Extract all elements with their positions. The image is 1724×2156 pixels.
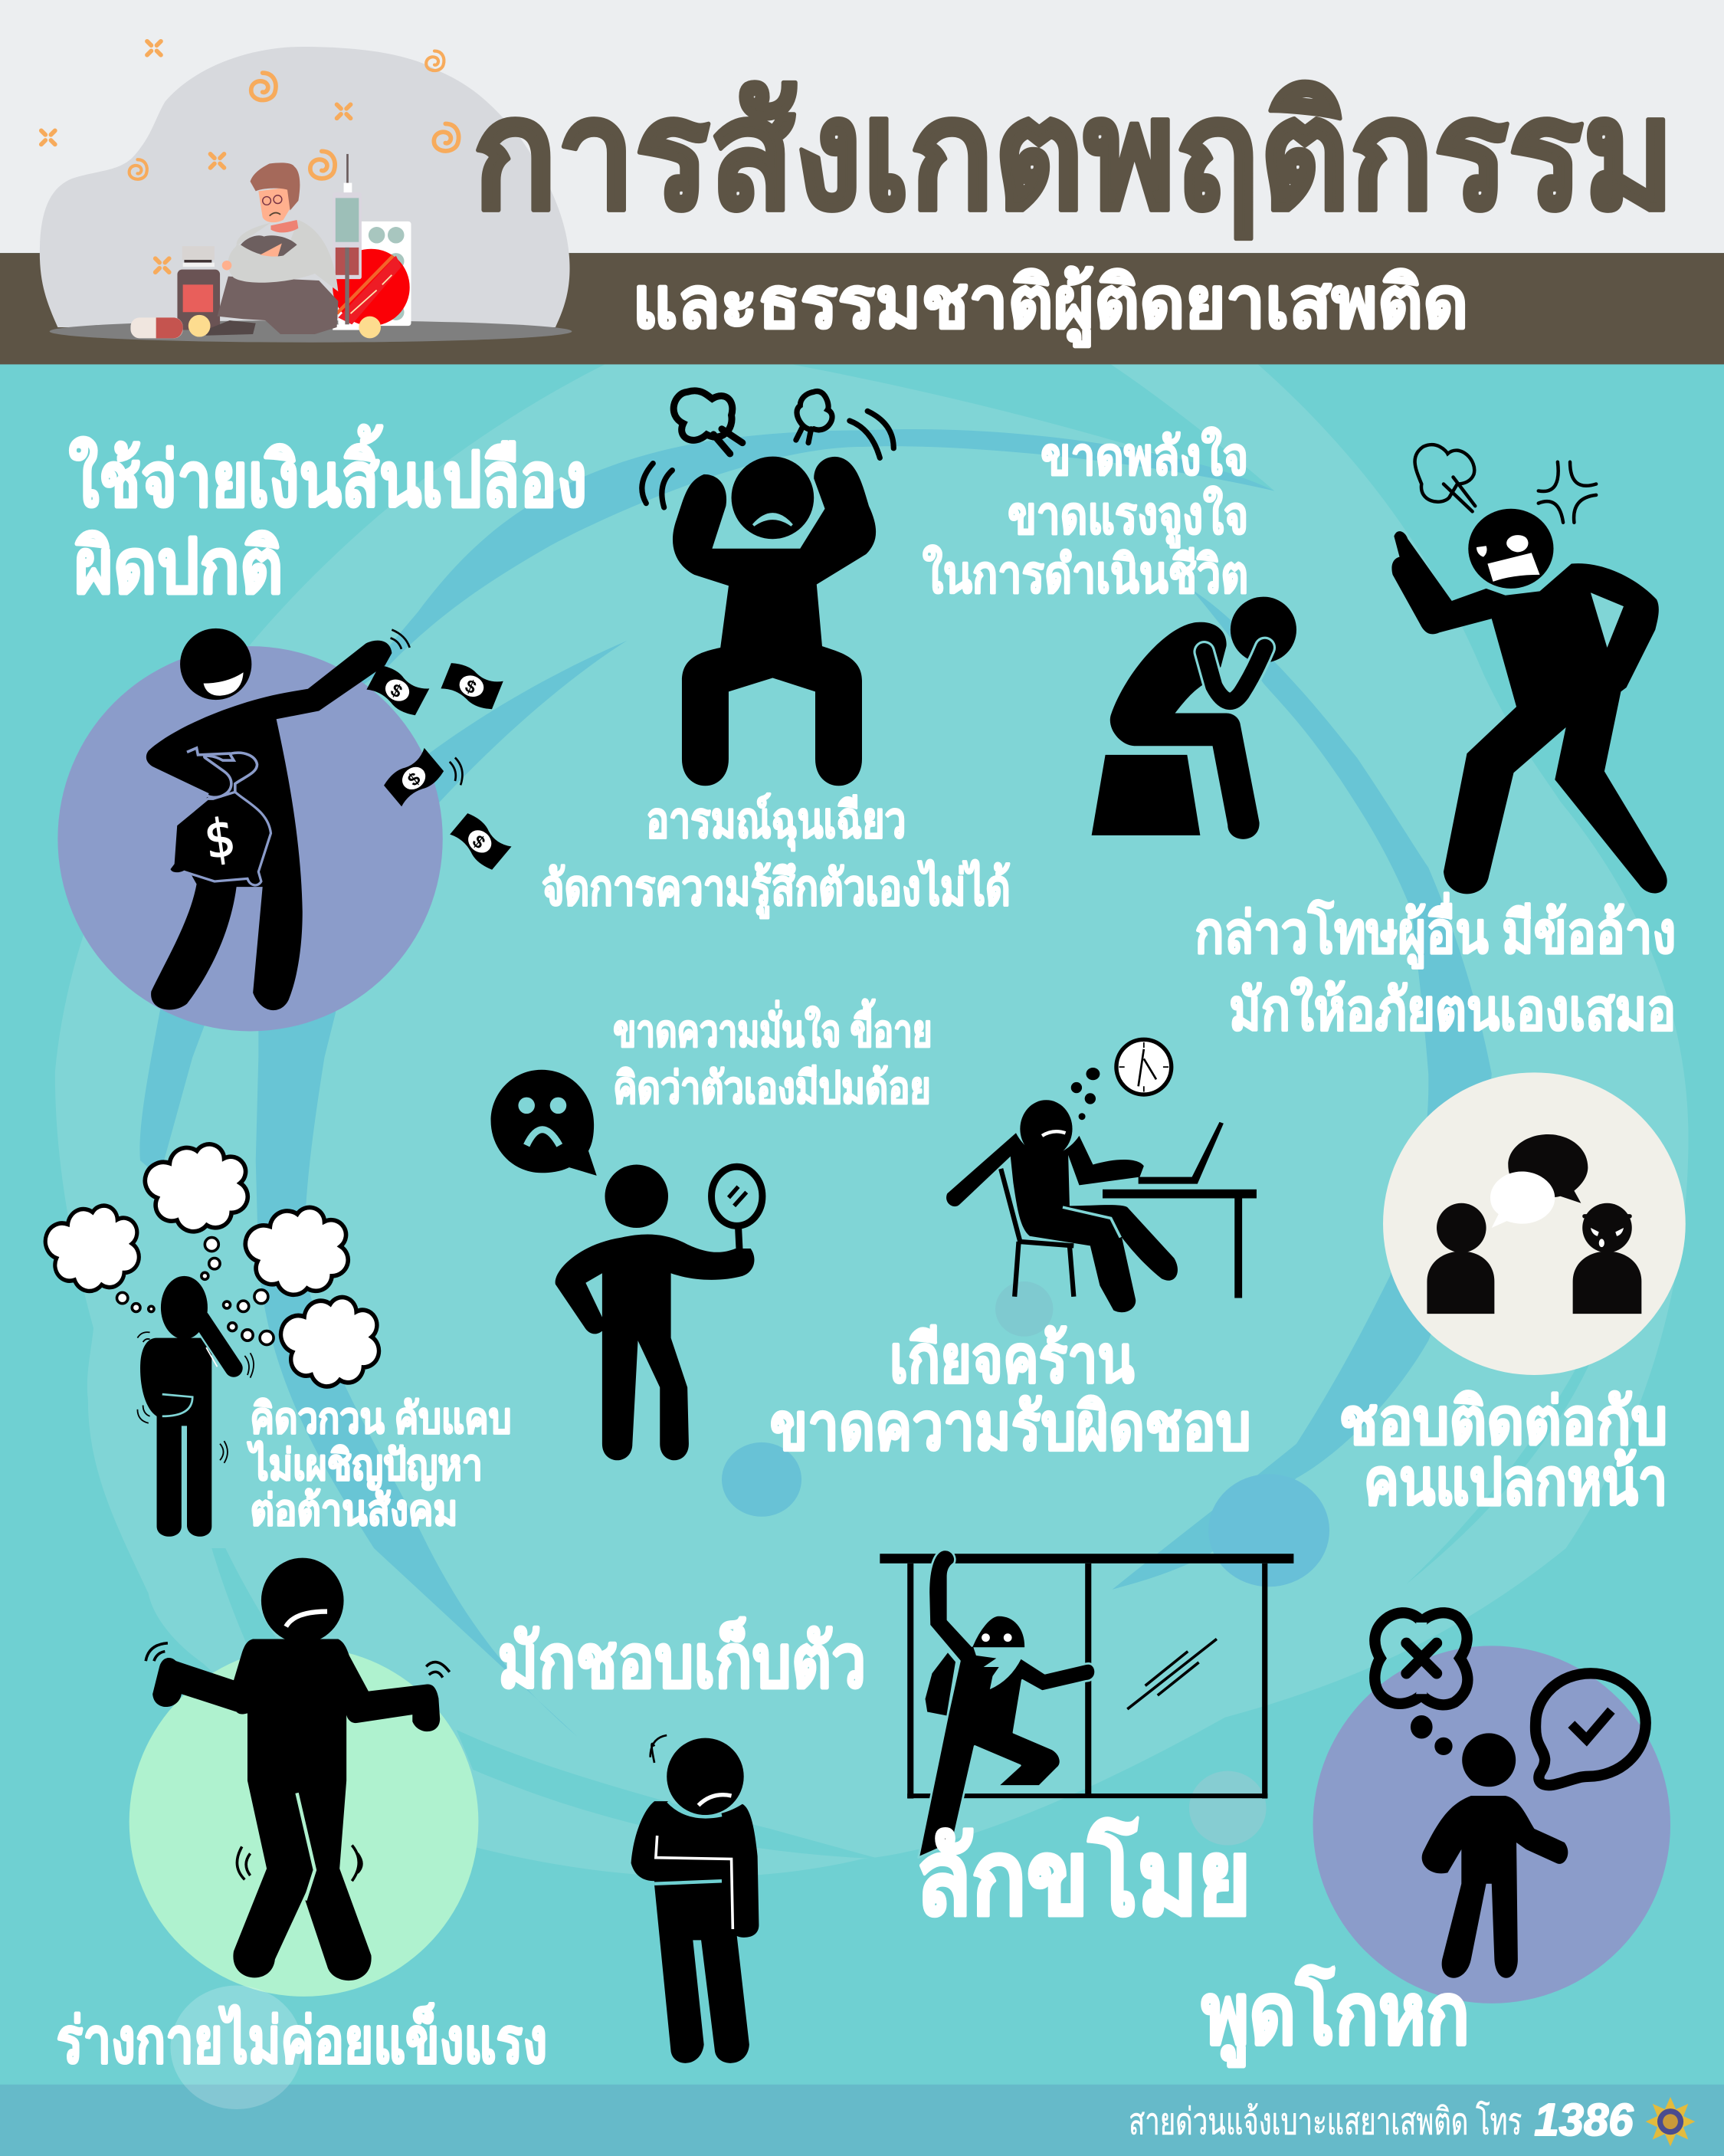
figure: angry pointing man — [1391, 509, 1667, 894]
icon: two busts talking — [1427, 1134, 1641, 1314]
icon: flying banknotes — [365, 630, 512, 871]
icon: flying banknotes: $ — [388, 680, 405, 702]
panel: lazy — [770, 1039, 1257, 1464]
text: mood swings: อารมณ์ฉุนเฉียว — [646, 793, 906, 852]
icon: thought clouds — [45, 1144, 379, 1386]
text: no motivation: ขาดแรงจูงใจ — [1008, 485, 1248, 549]
panel: withdrawn — [498, 1616, 866, 2063]
text: rumination: ไม่เผชิญปัญหา — [247, 1440, 483, 1490]
icon: steam clouds and shake marks — [642, 391, 893, 507]
subtitle: และธรรมชาติผู้ติดยาเสพติด — [632, 263, 1468, 347]
icon: pill pack — [333, 222, 411, 326]
text: lying: พูดโกหก — [1201, 1965, 1470, 2067]
text: lazy — [770, 1323, 1251, 1464]
text: low self esteem: ขาดความมั่นใจ ขี้อาย — [613, 999, 932, 1056]
footer hotline text: 1386 — [1534, 2094, 1634, 2145]
icon: flying banknotes: $ — [404, 768, 424, 790]
icon: syringe — [333, 154, 362, 330]
text: stealing: ลักขโมย — [916, 1817, 1251, 1936]
purple circle — [57, 646, 443, 1032]
panel: low self esteem — [491, 999, 932, 1460]
text: no motivation — [923, 426, 1248, 604]
text: rumination: ต่อต้านสังคม — [251, 1487, 457, 1534]
text: strangers — [1339, 1386, 1667, 1518]
faint circle — [170, 1986, 303, 2109]
icon: capsule and coins — [130, 315, 381, 338]
figure: standing man — [1422, 1733, 1568, 1978]
icon: medicine bottle — [177, 246, 220, 330]
panel: blaming others — [1195, 445, 1676, 1042]
panel: rumination — [45, 1144, 511, 1537]
panel: lying — [1201, 1613, 1670, 2067]
icon: check speech bubble — [1536, 1673, 1646, 1785]
text: mood swings — [542, 793, 1011, 919]
heading: overspending — [69, 425, 587, 609]
text: blaming others — [1195, 892, 1676, 1042]
header illustration: person with drugs — [40, 41, 572, 343]
panel: stealing — [880, 1550, 1293, 1936]
panel: weak body — [57, 1558, 547, 2109]
footer hotline text: สายด่วนแจ้งเบาะแสยาเสพติด โทร — [1129, 2100, 1522, 2142]
panel: strangers — [1339, 1072, 1686, 1518]
icon: seated man — [202, 162, 338, 336]
text: rumination — [247, 1394, 511, 1534]
cream circle — [1383, 1072, 1686, 1375]
figure: man throwing money: $ — [201, 807, 239, 871]
footer bar — [0, 2085, 1724, 2156]
figure: man sitting head in hands — [1092, 597, 1296, 839]
icon: flying banknotes: $ — [463, 675, 479, 697]
panel: overspending — [57, 425, 587, 1032]
text: low self esteem — [613, 999, 932, 1113]
icon: steam and anger mark — [1415, 445, 1596, 523]
figure: masked thief — [919, 1550, 1096, 1858]
figure: shaking man — [146, 1558, 450, 1980]
figure: man with hand on chin — [137, 1276, 254, 1537]
text: low self esteem: คิดว่าตัวเองมีปมด้อย — [613, 1064, 931, 1113]
icon: emblem — [1646, 2097, 1695, 2146]
panel: no motivation — [923, 426, 1296, 839]
panel: mood swings — [542, 391, 1011, 919]
figure: man throwing money — [146, 628, 392, 1010]
text: mood swings: จัดการความรู้สึกตัวเองไม่ได้ — [542, 858, 1011, 919]
figure: man gripping head — [673, 457, 876, 786]
text: lazy: ขาดความรับผิดชอบ — [770, 1390, 1251, 1464]
icon: sad speech bubble — [491, 1070, 597, 1176]
figure: slumped man at desk — [946, 1100, 1257, 1312]
icon: flying banknotes: $ — [469, 831, 489, 852]
text: no motivation: ขาดพลังใจ — [1041, 426, 1248, 486]
text: rumination: คิดวกวน คับแคบ — [251, 1394, 511, 1442]
purple circle — [1313, 1646, 1670, 2003]
icon: X thought bubble — [1375, 1613, 1467, 1755]
icon: window frame — [880, 1554, 1293, 1799]
heading: overspending: ผิดปกติ — [74, 524, 284, 609]
figure: man with arm across body — [631, 1735, 759, 2063]
text: weak body: ร่างกายไม่ค่อยแข็งแรง — [57, 2003, 547, 2076]
text: lazy: เกียจคร้าน — [890, 1323, 1134, 1396]
heading: overspending: ใช้จ่ายเงินสิ้นเปลือง — [69, 425, 587, 522]
icon: clock with thought dots — [1071, 1039, 1172, 1120]
text: strangers: ชอบติดต่อกับ — [1339, 1386, 1667, 1458]
icon: orange spirals — [41, 41, 459, 272]
green circle — [129, 1647, 478, 1997]
text: withdrawn: มักชอบเก็บตัว — [498, 1616, 866, 1703]
header background — [0, 0, 1724, 364]
figure: man with mirror — [556, 1165, 762, 1460]
text: no motivation: ในการดำเนินชีวิต — [923, 544, 1248, 604]
